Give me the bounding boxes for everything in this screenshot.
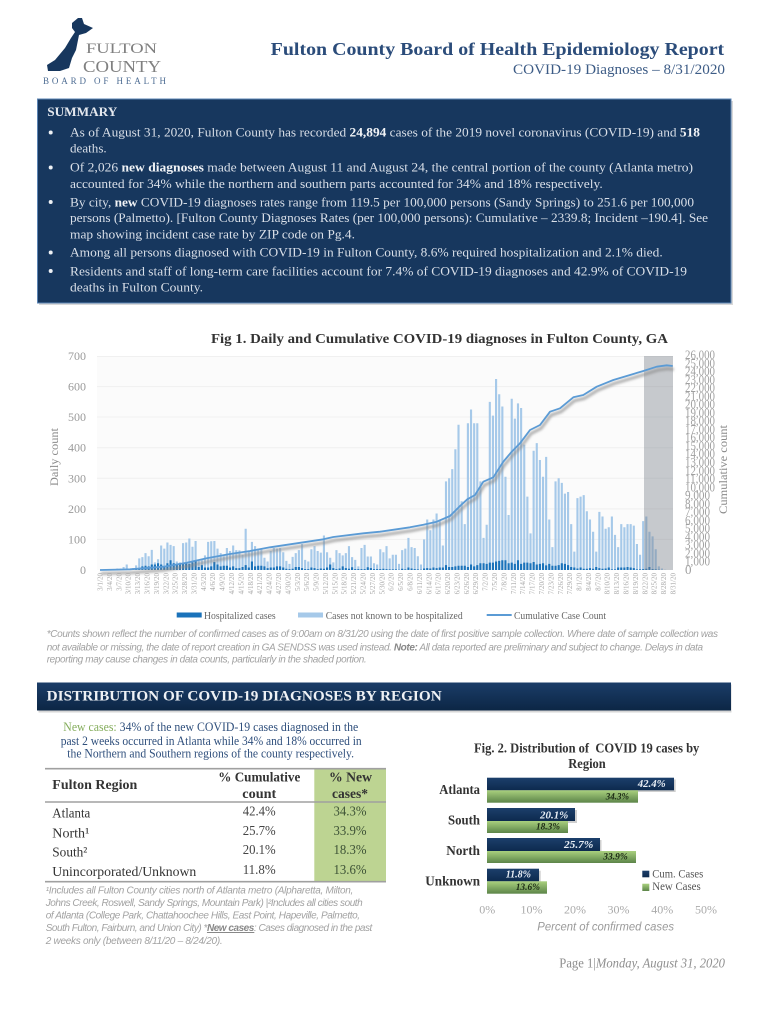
page footer: Page 1|Monday, August 31, 2020 <box>559 956 725 971</box>
date axis labels: 6/26/20 <box>463 573 471 594</box>
date axis labels <box>96 573 678 594</box>
summary text: deaths. <box>70 141 107 156</box>
date axis labels: 7/26/20 <box>557 573 565 594</box>
summary text <box>70 125 708 295</box>
figure 1 title: Fig 1. Daily and Cumulative COVID-19 diagnoses in Fulton County, GA <box>211 332 669 347</box>
summary bullets <box>49 130 53 273</box>
date axis labels: 5/6/20 <box>303 573 311 591</box>
left axis labels <box>68 349 86 577</box>
right axis labels: 2,000 <box>685 546 710 560</box>
date axis labels: 4/21/20 <box>256 573 264 594</box>
cumulative line shadow <box>101 369 674 574</box>
logo: Fulton County Board of Health <box>43 18 166 86</box>
date axis labels: 3/16/20 <box>144 573 152 594</box>
table rows: 25.7% <box>243 824 276 839</box>
North bars: 33.9% <box>602 852 628 862</box>
summary heading: SUMMARY <box>47 104 118 119</box>
date axis labels: 7/14/20 <box>519 573 527 594</box>
date axis labels: 7/2/20 <box>482 573 490 591</box>
date axis labels: 4/30/20 <box>284 573 292 594</box>
chart legend: Cumulative Case Count <box>514 610 606 622</box>
region labels: South <box>448 813 480 828</box>
South bars: 20.1% <box>539 809 568 821</box>
new cases text: past 2 weeks occurred in Atlanta while 34% and 18% occurred in <box>61 734 362 748</box>
chart legend: Hospitalized cases <box>204 610 276 622</box>
logo word: Board of Health: BOARD OF HEALTH <box>43 76 166 86</box>
right axis labels: 21,000 <box>685 388 715 403</box>
region labels: North <box>446 844 480 859</box>
right axis labels: 15,000 <box>685 438 715 453</box>
table rows: 13.6% <box>334 863 367 878</box>
bar shadows <box>489 780 676 884</box>
date axis labels: 4/27/20 <box>275 573 283 594</box>
new cases text <box>61 720 362 760</box>
right axis labels: 5,000 <box>685 521 710 536</box>
North bars <box>487 838 636 863</box>
date axis labels: 7/23/20 <box>547 573 555 594</box>
date axis labels: 6/23/20 <box>453 573 461 594</box>
right axis labels: 24,000 <box>685 364 715 378</box>
right axis labels: 0 <box>685 562 692 577</box>
date axis labels: 3/4/20 <box>106 573 114 591</box>
Atlanta bars: 34.3% <box>605 792 629 802</box>
chart legend <box>177 610 606 622</box>
right axis labels: 12,000 <box>685 463 715 478</box>
date axis labels: 4/9/20 <box>219 573 227 591</box>
date axis labels: 5/9/20 <box>312 573 320 591</box>
region labels: Unknown <box>425 874 480 889</box>
South bars <box>487 808 575 833</box>
left axis labels: 500 <box>68 410 86 424</box>
left axis labels: 400 <box>68 441 86 455</box>
date axis labels: 6/11/20 <box>416 573 424 594</box>
left axis labels: 300 <box>68 471 86 485</box>
date axis labels: 5/30/20 <box>378 573 386 594</box>
right axis labels: 1,000 <box>685 554 710 569</box>
table rows: South² <box>52 846 87 861</box>
date axis labels: 4/18/20 <box>247 573 255 594</box>
logo word: Fulton: FULTON <box>86 41 157 57</box>
table rows: 20.1% <box>243 843 276 858</box>
date axis labels: 7/5/20 <box>491 573 499 591</box>
summary text: map showing incident case rate by ZIP code on Pg.4. <box>70 227 355 242</box>
date axis labels: 7/29/20 <box>566 573 574 594</box>
date axis labels: 5/21/20 <box>350 573 358 594</box>
right axis labels: 17,000 <box>685 421 715 436</box>
date axis labels: 3/1/20 <box>96 573 104 591</box>
left axis labels: 700 <box>68 349 86 363</box>
table header <box>52 771 373 802</box>
date axis labels: 7/8/20 <box>500 573 508 591</box>
x axis ticks: 40% <box>651 902 673 916</box>
right axis labels: 11,000 <box>685 471 715 486</box>
table header: % Cumulative <box>218 771 300 786</box>
right axis labels: 3,000 <box>685 537 710 552</box>
date axis labels: 5/18/20 <box>341 573 349 594</box>
right axis labels: 7,000 <box>685 504 710 519</box>
date axis labels: 8/10/20 <box>604 573 612 594</box>
date axis labels: 4/15/20 <box>237 573 245 594</box>
chart: daily and cumulative diagnoses <box>47 347 730 622</box>
summary text: accounted for 34% while the northern and southern parts accounted for 34% and 18% respectively. <box>70 176 603 191</box>
date axis labels: 4/12/20 <box>228 573 236 594</box>
right axis labels: 13,000 <box>685 454 715 470</box>
logo word: County: COUNTY <box>83 57 161 76</box>
cumulative case count line <box>100 365 673 570</box>
chart footnote <box>47 629 718 666</box>
date axis labels: 3/7/20 <box>115 573 123 591</box>
Unknown bars: 13.6% <box>516 883 540 893</box>
date axis labels: 8/25/20 <box>651 573 659 594</box>
x axis ticks: 20% <box>564 902 586 916</box>
table footnote: ¹Includes all Fulton County cities north of Atlanta metro (Alpharetta, Milton, <box>46 885 353 896</box>
summary text: As of August 31, 2020, Fulton County has recorded 24,894 cases of the 2019 novel coronavirus (COVID-19) and 518 <box>70 125 701 140</box>
date axis labels: 8/19/20 <box>632 573 640 594</box>
left axis labels: 600 <box>68 380 86 394</box>
right axis labels: 25,000 <box>685 355 715 370</box>
left axis labels: 200 <box>68 502 86 516</box>
right axis labels: 22,000 <box>685 380 715 395</box>
table rows: Atlanta <box>52 806 91 821</box>
summary text: persons (Palmetto). [Fulton County Diagnoses Rates (per 100,000 persons): Cumulative – 2339.8; Incident –190.4]. See <box>70 210 708 225</box>
left axis title: Daily count <box>47 427 61 486</box>
date axis labels: 5/15/20 <box>331 573 339 594</box>
date axis labels: 6/14/20 <box>425 573 433 594</box>
summary text: Among all persons diagnosed with COVID-19 in Fulton County, 8.6% required hospitalization and 2.1% died. <box>70 245 663 260</box>
date axis labels: 6/29/20 <box>472 573 480 594</box>
right axis labels: 23,000 <box>685 372 715 387</box>
South bars: 18.3% <box>536 822 560 832</box>
date axis labels: 4/3/20 <box>200 573 208 591</box>
table header: % New <box>329 771 373 786</box>
date axis labels: 3/22/20 <box>162 573 170 594</box>
subtitle: COVID-19 Diagnoses – 8/31/2020 <box>513 62 725 78</box>
date axis labels: 7/20/20 <box>538 573 546 594</box>
summary text: Residents and staff of long-term care facilities account for 7.4% of COVID-19 diagnoses and 42.9% of COVID-19 <box>70 263 687 278</box>
table header: Fulton Region <box>52 778 138 793</box>
x axis ticks: 50% <box>695 902 717 916</box>
bars: cases not known to be hospitalized <box>111 379 665 570</box>
Unknown bars <box>487 869 547 894</box>
date axis labels: 3/13/20 <box>134 573 142 594</box>
Atlanta bars: 42.4% <box>637 778 666 790</box>
table footnote: 2 weeks only (between 8/11/20 – 8/24/20). <box>45 936 223 947</box>
region labels: Atlanta <box>439 783 480 798</box>
date axis labels: 6/20/20 <box>444 573 452 594</box>
chart legend: Cases not known to be hospitalized <box>326 610 463 622</box>
chart: distribution of cases by region <box>425 778 717 934</box>
table rows: 42.4% <box>243 805 276 820</box>
date axis labels: 4/6/20 <box>209 573 217 591</box>
right axis labels: 18,000 <box>685 413 715 428</box>
right axis labels: 19,000 <box>685 405 715 420</box>
chart footnote: reporting may cause changes in data counts, particularly in the shaded portion. <box>47 655 367 666</box>
right axis labels: 4,000 <box>685 529 710 544</box>
table rows: Unincorporated/Unknown <box>52 865 196 880</box>
legend: Cum. Cases <box>652 869 704 881</box>
x axis ticks <box>479 902 717 916</box>
date axis labels: 8/4/20 <box>585 573 593 591</box>
table footnote: of Atlanta (College Park, Chattahoochee Hills, East Point, Hapeville, Palmetto, <box>46 910 360 921</box>
x axis ticks: 0% <box>479 902 495 916</box>
shaded incomplete-data region <box>644 356 673 570</box>
date axis labels: 3/25/20 <box>172 573 180 594</box>
right axis labels <box>685 347 715 577</box>
Atlanta bars <box>487 778 674 803</box>
date axis labels: 8/1/20 <box>576 573 584 591</box>
date axis labels: 3/19/20 <box>153 573 161 594</box>
date axis labels: 3/28/20 <box>181 573 189 594</box>
right axis labels: 26,000 <box>685 347 715 362</box>
date axis labels: 6/17/20 <box>435 573 443 594</box>
right axis labels: 9,000 <box>685 488 710 503</box>
date axis labels: 8/16/20 <box>622 573 630 594</box>
chart footnote: *Counts shown reflect the number of confirmed cases as of 9:00am on 8/31/20 using the date of first positive sample collection. Where date of sample collection was <box>47 629 718 640</box>
date axis labels: 7/17/20 <box>529 573 537 594</box>
left axis labels: 100 <box>68 532 86 546</box>
date axis labels: 7/11/20 <box>510 573 518 594</box>
table rows: North¹ <box>52 826 89 841</box>
right axis labels: 14,000 <box>685 446 715 461</box>
table footnote: South Fulton, Fairburn, and Union City) *New cases: Cases diagnosed in the past <box>46 923 374 934</box>
right axis labels: 8,000 <box>685 496 710 511</box>
date axis labels: 8/22/20 <box>641 573 649 594</box>
table rows: 34.3% <box>334 805 367 820</box>
date axis labels: 5/12/20 <box>322 573 330 594</box>
x axis ticks: 30% <box>608 902 630 916</box>
date axis labels: 5/27/20 <box>369 573 377 594</box>
right axis labels: 6,000 <box>685 512 710 527</box>
figure 2 title <box>474 741 700 771</box>
table footnote <box>45 885 374 947</box>
table rows: 11.8% <box>243 863 276 878</box>
table header: count <box>242 787 277 802</box>
date axis labels: 6/8/20 <box>406 573 414 591</box>
section heading: DISTRIBUTION OF COVID-19 DIAGNOSES BY REGION <box>47 689 442 705</box>
right axis labels: 16,000 <box>685 430 715 445</box>
bars: hospitalized cases <box>127 560 659 570</box>
Unknown bars: 11.8% <box>506 869 531 881</box>
North bars: 25.7% <box>563 839 593 851</box>
date axis labels: 3/10/20 <box>125 573 133 594</box>
figure 2 title: Fig. 2. Distribution of COVID 19 cases by <box>474 741 700 756</box>
panel: summary <box>38 99 733 305</box>
new cases text: New cases: 34% of the new COVID-19 cases diagnosed in the <box>63 720 359 734</box>
region labels <box>425 783 480 889</box>
date axis labels: 8/7/20 <box>594 573 602 591</box>
date axis labels: 5/3/20 <box>294 573 302 591</box>
right axis labels: 20,000 <box>685 397 715 412</box>
date axis labels: 8/28/20 <box>660 573 668 594</box>
table rows <box>52 805 367 880</box>
table: Fulton region distribution <box>45 769 386 882</box>
figure 2 title: Region <box>568 756 606 771</box>
legend: New Cases <box>652 881 701 893</box>
left axis labels: 0 <box>80 563 86 577</box>
date axis labels: 4/24/20 <box>266 573 274 594</box>
table footnote: Johns Creek, Roswell, Sandy Springs, Mountain Park) |²Includes all cities south <box>45 898 363 909</box>
title: Fulton County Board of Health Epidemiology Report <box>271 39 724 59</box>
table header: cases* <box>332 787 368 802</box>
date axis labels: 8/31/20 <box>670 573 678 594</box>
icon: county silhouette <box>47 18 93 71</box>
date axis labels: 6/5/20 <box>397 573 405 591</box>
summary text: By city, new COVID-19 diagnoses rates range from 119.5 per 100,000 persons (Sandy Springs) to 251.6 per 100,000 <box>70 195 694 210</box>
table rows: 18.3% <box>334 843 367 858</box>
summary text: deaths in Fulton County. <box>70 280 203 295</box>
summary text: Of 2,026 new diagnoses made between August 11 and August 24, the central portion of the county (Atlanta metro) <box>70 160 693 175</box>
table rows: 33.9% <box>334 824 367 839</box>
x axis ticks: 10% <box>520 902 542 916</box>
date axis labels: 6/2/20 <box>388 573 396 591</box>
new cases text: the Northern and Southern regions of the county respectively. <box>67 746 354 760</box>
section banner: distribution by region <box>37 682 732 712</box>
x axis title: Percent of confirmed cases <box>537 920 674 934</box>
legend <box>642 869 704 893</box>
right axis labels: 10,000 <box>685 479 715 494</box>
right axis title: Cumulative count <box>716 424 730 514</box>
date axis labels: 8/13/20 <box>613 573 621 594</box>
chart footnote: not available or missing, the date of report creation in GA SENDSS was used instead. Note: All data reported are preliminary and subject to change. Delays in data <box>47 643 703 654</box>
date axis labels: 3/31/20 <box>190 573 198 594</box>
date axis labels: 5/24/20 <box>360 573 368 594</box>
